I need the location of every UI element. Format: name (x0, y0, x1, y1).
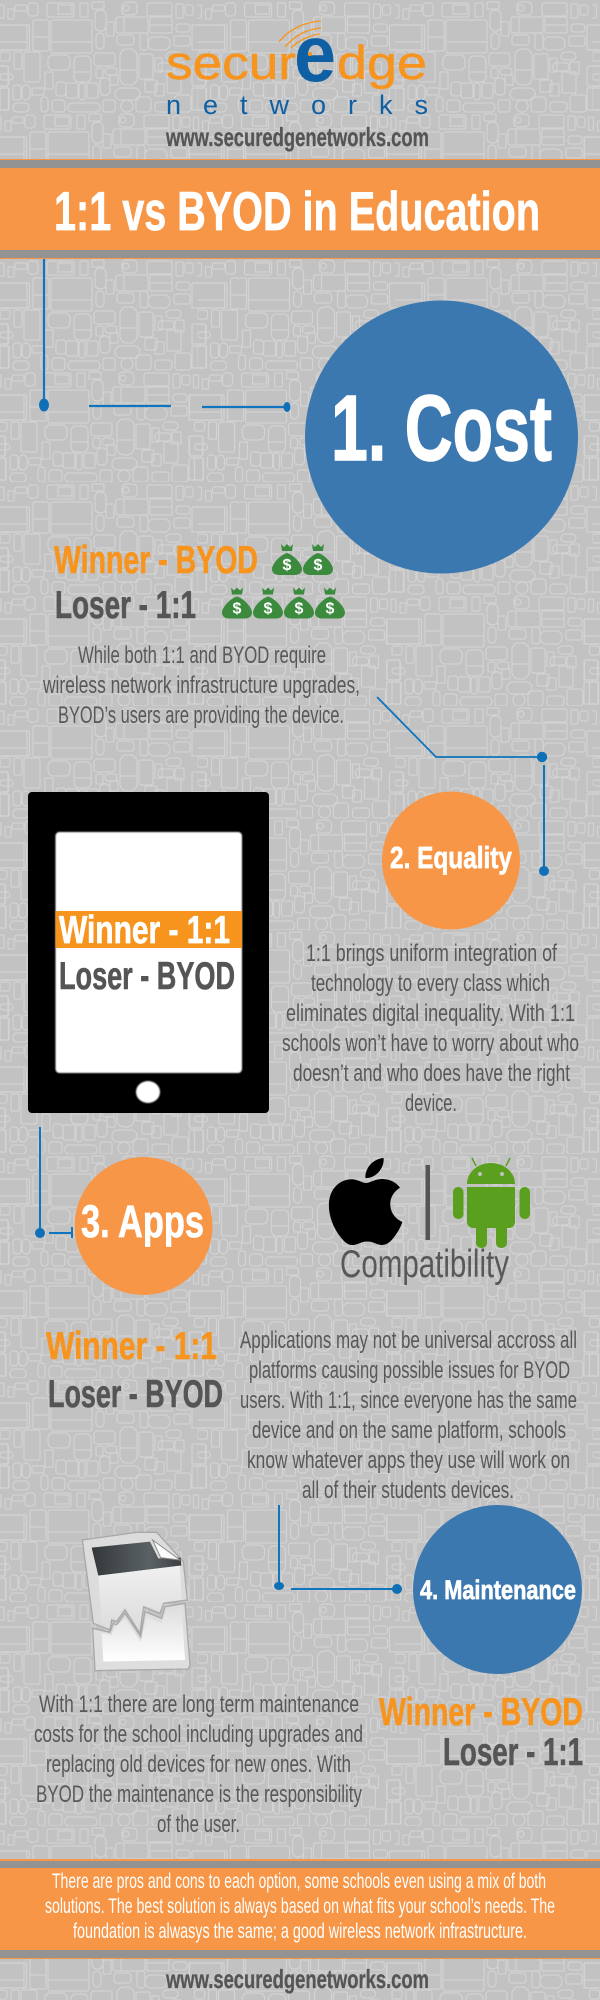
heading: 2. Equality: 2. Equality (390, 840, 513, 875)
logo word: networks: networks (166, 90, 428, 120)
icon: loser money bags (222, 588, 345, 618)
text block: maintenance (34, 1691, 363, 1838)
text block: equality: device. (405, 1090, 457, 1117)
icon: winner money bags: $ (314, 557, 323, 574)
winner loser: maintenance (379, 1691, 583, 1774)
connector: cost to equality (377, 697, 549, 876)
footer text (45, 1870, 555, 1943)
winner loser: apps: Winner - 1:1 (46, 1325, 217, 1368)
winner label: Winner - BYOD (54, 539, 258, 582)
connector: tablet to apps (35, 1127, 72, 1238)
icon: winner money bags (272, 544, 333, 575)
icon: loser money bags: $ (295, 600, 304, 618)
text block: maintenance: replacing old devices for new ones. With (46, 1751, 351, 1778)
panel: 3. apps circle (74, 1157, 212, 1295)
text block: apps (240, 1327, 577, 1504)
divider between logos (426, 1165, 430, 1240)
icon: loser money bags: $ (264, 600, 273, 618)
winner loser: apps (46, 1325, 223, 1416)
title banner (0, 159, 600, 259)
panel: 1. cost circle (305, 300, 578, 574)
text block: equality (282, 940, 579, 1117)
logo word: dge: dge (337, 36, 427, 89)
logo dot (308, 52, 312, 56)
icon: android logo (453, 1158, 530, 1248)
text block: maintenance: of the user. (157, 1811, 240, 1838)
icon: apple logo (329, 1158, 402, 1245)
logo word: secur: secur (166, 36, 296, 89)
logo wireless arcs (279, 21, 321, 48)
icon: loser money bags: $ (233, 600, 242, 618)
winner label: Winner - 1:1 (59, 909, 230, 952)
text block: cost (42, 642, 360, 729)
icon: winner money bags: $ (283, 557, 292, 574)
text block: cost: BYOD’s users are providing the device. (58, 702, 344, 729)
text block: maintenance: BYOD the maintenance is the responsibility (36, 1781, 363, 1808)
winner loser: cost (54, 539, 258, 627)
loser label: Loser - BYOD (59, 955, 235, 998)
icon: loser money bags: $ (326, 600, 335, 618)
panel: 4. maintenance circle (413, 1505, 582, 1674)
winner loser: apps: Loser - BYOD (48, 1373, 223, 1416)
logo letter: e: e (294, 9, 336, 98)
icon: broken tablet (82, 1532, 190, 1671)
text block: apps: all of their students devices. (302, 1477, 514, 1504)
text block: cost: wireless network infrastructure upgrades, (42, 672, 360, 699)
heading: 3. Apps: 3. Apps (81, 1196, 204, 1247)
text block: cost: While both 1:1 and BYOD require (78, 642, 326, 669)
footer banner (0, 1859, 600, 1959)
website url bottom: www.securedgenetworks.com (165, 1964, 429, 1994)
text block: maintenance: With 1:1 there are long term maintenance (39, 1691, 359, 1718)
connector: title to cost (39, 259, 290, 412)
label: compatibility: Compatibility (340, 1243, 509, 1286)
text block: maintenance: costs for the school including upgrades and (34, 1721, 363, 1748)
website url top: www.securedgenetworks.com (165, 122, 429, 152)
logo: secure edge networks (166, 9, 428, 120)
loser label: Loser - 1:1 (55, 584, 196, 627)
icon: tablet with result (28, 792, 269, 1113)
connector: apps to maintenance (274, 1505, 402, 1594)
panel: 2. equality circle (382, 792, 520, 930)
